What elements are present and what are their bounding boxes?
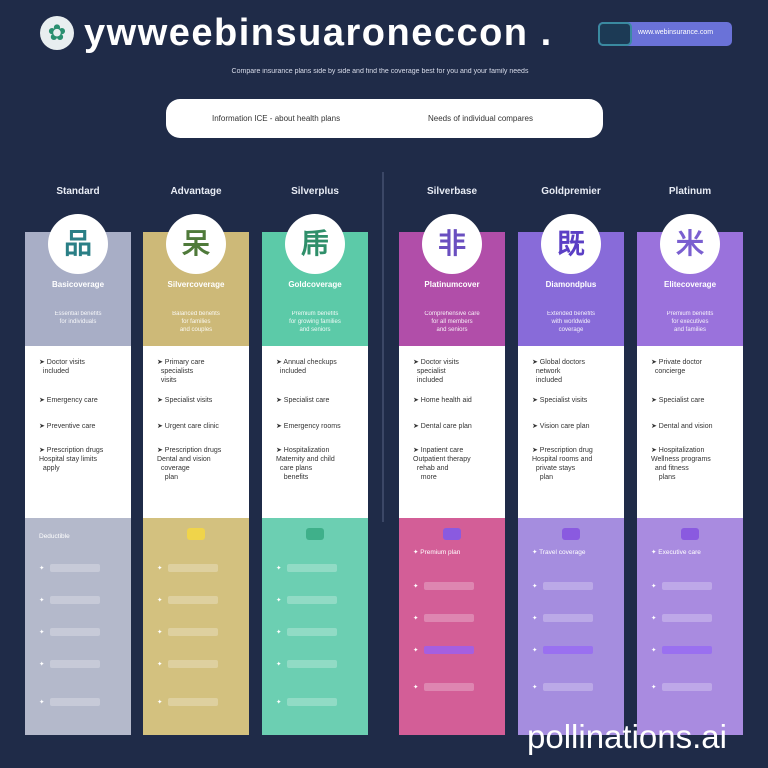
subtitle: Compare insurance plans side by side and find the coverage best for you and your family needs bbox=[232, 68, 528, 75]
panel: plan 1: ✦ bbox=[39, 565, 44, 572]
panel: plan 5: ➤ Vision care plan bbox=[532, 423, 590, 430]
panel: plan 3: 乕 bbox=[301, 228, 329, 259]
panel: plan 3: ➤ Specialist care bbox=[276, 397, 329, 404]
panel: plan 4: Outpatient therapy bbox=[413, 456, 471, 463]
panel: plan 3: and seniors bbox=[299, 327, 331, 333]
panel: plan 2: ✦ bbox=[157, 699, 162, 706]
panel: plan 5: plan bbox=[540, 474, 553, 481]
panel: plan 4: ✦ bbox=[413, 615, 418, 622]
panel: plan 4: ➤ Doctor visits bbox=[413, 359, 459, 366]
divider bbox=[382, 172, 384, 522]
panel: plan 1: ➤ Doctor visits bbox=[39, 359, 85, 366]
panel: plan 1 bbox=[25, 214, 131, 735]
panel: plan 5: 既 bbox=[557, 228, 585, 259]
panel: plan 2: ➤ Prescription drugs bbox=[157, 447, 221, 454]
text: Silverplus bbox=[291, 186, 339, 197]
panel: plan 4: ✦ bbox=[413, 583, 418, 590]
panel: plan 2: ➤ Specialist visits bbox=[157, 397, 212, 404]
panel: plan 2: ➤ Primary care bbox=[157, 359, 204, 366]
panel: plan 3: Goldcoverage bbox=[288, 280, 342, 289]
panel: plan 3: ➤ Emergency rooms bbox=[276, 423, 341, 430]
panel: plan 4: for all members bbox=[431, 319, 473, 325]
panel: plan 4: ✦ bbox=[413, 684, 418, 691]
panel: plan 3: for growing families bbox=[289, 319, 341, 325]
panel: plan 5: ➤ Prescription drug bbox=[532, 447, 593, 454]
panel: plan 3: Premium benefits bbox=[292, 311, 338, 317]
panel: plan 2: for families bbox=[181, 319, 210, 325]
panel: plan 6: ➤ Hospitalization bbox=[651, 447, 704, 454]
panel: plan 1: Hospital stay limits bbox=[39, 456, 97, 463]
panel: plan 1: included bbox=[43, 368, 69, 375]
panel: plan 2: and couples bbox=[180, 327, 212, 333]
column labels: Standard bbox=[56, 186, 100, 197]
panel: plan 5: private stays bbox=[536, 465, 575, 472]
panel: plan 3: ➤ Hospitalization bbox=[276, 447, 329, 454]
text: Silverbase bbox=[427, 186, 477, 197]
panel: plan 6: ✦ bbox=[651, 647, 656, 654]
panel: plan 4: specialist bbox=[417, 368, 446, 375]
panel: plan 2 bbox=[143, 214, 249, 735]
panel: plan 6: Elitecoverage bbox=[664, 280, 716, 289]
panel: plan 5: ➤ Specialist visits bbox=[532, 397, 587, 404]
title: ywweebinsuaroneccon . bbox=[84, 12, 553, 54]
panel: plan 1: ✦ bbox=[39, 597, 44, 604]
panel: plan 5: Hospital rooms and bbox=[532, 456, 592, 463]
panel: plan 3: ✦ bbox=[276, 565, 281, 572]
panel: plan 2: Dental and vision bbox=[157, 456, 211, 463]
panel: plan 2: ✦ bbox=[157, 661, 162, 668]
panel: plan 3 bbox=[262, 214, 368, 735]
panel: plan 6: Wellness programs bbox=[651, 456, 711, 463]
panel: plan 5: ✦ Travel coverage bbox=[532, 549, 586, 556]
panel: plan 3: ✦ bbox=[276, 661, 281, 668]
panel: plan 5: coverage bbox=[559, 327, 583, 333]
logo icon bbox=[40, 16, 74, 50]
panel: plan 4: rehab and bbox=[417, 465, 448, 472]
panel: plan 6: ➤ Specialist care bbox=[651, 397, 704, 404]
text: Goldpremier bbox=[541, 186, 601, 197]
panel: plan 4: ➤ Home health aid bbox=[413, 397, 472, 404]
panel: plan 5: network bbox=[536, 368, 560, 375]
panel: plan 5: ✦ bbox=[532, 615, 537, 622]
panel: plan 2: ✦ bbox=[157, 629, 162, 636]
panel: plan 2: Balanced benefits bbox=[172, 311, 220, 317]
panel: plan 5: ➤ Global doctors bbox=[532, 359, 585, 366]
watermark: pollinations.ai bbox=[527, 718, 727, 755]
panel: plan 4: Comprehensive care bbox=[424, 311, 480, 317]
panel: plan 1: for individuals bbox=[60, 319, 96, 325]
tab bar bbox=[166, 99, 603, 138]
panel: plan 6: ✦ bbox=[651, 615, 656, 622]
panel: plan 5: with worldwide bbox=[551, 319, 590, 325]
panel: plan 3: ➤ Annual checkups bbox=[276, 359, 337, 366]
panel: plan 1: Deductible bbox=[39, 533, 70, 540]
panel: plan 4: included bbox=[417, 377, 443, 384]
panel: plan 6: concierge bbox=[655, 368, 685, 375]
panel: plan 6: ✦ bbox=[651, 583, 656, 590]
panel: plan 2: visits bbox=[161, 377, 176, 384]
panel: plan 5: ✦ bbox=[532, 684, 537, 691]
panel: plan 3: ✦ bbox=[276, 699, 281, 706]
panel: plan 1: apply bbox=[43, 465, 60, 472]
panel: plan 4: ✦ Premium plan bbox=[413, 549, 460, 556]
panel: plan 2: Silvercoverage bbox=[168, 280, 224, 289]
panel: plan 5: ✦ bbox=[532, 583, 537, 590]
panel: plan 6 bbox=[637, 214, 743, 735]
panel: plan 5 bbox=[518, 214, 624, 735]
panel: plan 2: plan bbox=[165, 474, 178, 481]
panel: plan 6: 米 bbox=[676, 228, 704, 259]
panel: plan 6: for executives bbox=[671, 319, 709, 325]
tab bar: Needs of individual compares bbox=[428, 114, 533, 123]
panel: plan 1: Essential benefits bbox=[54, 311, 102, 317]
panel: plan 1: Basicoverage bbox=[52, 280, 104, 289]
panel: plan 3: benefits bbox=[284, 474, 308, 481]
panel: plan 4: ➤ Dental care plan bbox=[413, 423, 472, 430]
panel: plan 4: ➤ Inpatient care bbox=[413, 447, 463, 454]
panel: plan 2: 呆 bbox=[182, 228, 210, 259]
panel: plan 5: Diamondplus bbox=[546, 280, 596, 289]
panel: plan 6: Premium benefits bbox=[667, 311, 713, 317]
panel: plan 6: ✦ bbox=[651, 684, 656, 691]
panel: plan 4: more bbox=[421, 474, 437, 481]
tab bar: Information ICE - about health plans bbox=[212, 114, 340, 123]
panel: plan 1: ✦ bbox=[39, 629, 44, 636]
panel: plan 1: ➤ Emergency care bbox=[39, 397, 98, 404]
panel: plan 3: Maternity and child bbox=[276, 456, 335, 463]
panel: plan 5: ✦ bbox=[532, 647, 537, 654]
panel: plan 5: included bbox=[536, 377, 562, 384]
panel: plan 6: ➤ Dental and vision bbox=[651, 423, 713, 430]
header button bbox=[598, 22, 732, 46]
text: Advantage bbox=[170, 186, 222, 197]
panel: plan 6: ✦ Executive care bbox=[651, 549, 701, 556]
panel: plan 2: coverage bbox=[161, 465, 190, 472]
text: Platinum bbox=[669, 186, 711, 197]
panel: plan 1: 品 bbox=[64, 228, 92, 259]
panel: plan 5: Extended benefits bbox=[547, 311, 595, 317]
header button: www.webinsurance.com bbox=[638, 29, 713, 36]
panel: plan 3: ✦ bbox=[276, 597, 281, 604]
panel: plan 4: 非 bbox=[438, 228, 466, 259]
panel: plan 4: and seniors bbox=[436, 327, 468, 333]
panel: plan 6: and families bbox=[674, 327, 706, 333]
panel: plan 1: ✦ bbox=[39, 699, 44, 706]
panel: plan 2: ➤ Urgent care clinic bbox=[157, 423, 219, 430]
panel: plan 3: ✦ bbox=[276, 629, 281, 636]
panel: plan 4 bbox=[399, 214, 505, 735]
panel: plan 2: ✦ bbox=[157, 565, 162, 572]
panel: plan 3: included bbox=[280, 368, 306, 375]
panel: plan 2: specialists bbox=[161, 368, 193, 375]
panel: plan 6: and fitness bbox=[655, 465, 689, 472]
logo icon: ✿ bbox=[48, 20, 66, 45]
panel: plan 1: ➤ Prescription drugs bbox=[39, 447, 103, 454]
panel: plan 4: ✦ bbox=[413, 647, 418, 654]
panel: plan 3: care plans bbox=[280, 465, 312, 472]
panel: plan 1: ✦ bbox=[39, 661, 44, 668]
panel: plan 6: ➤ Private doctor bbox=[651, 359, 702, 366]
panel: plan 1: ➤ Preventive care bbox=[39, 423, 95, 430]
panel: plan 2: ✦ bbox=[157, 597, 162, 604]
panel: plan 4: Platinumcover bbox=[424, 280, 480, 289]
panel: plan 6: plans bbox=[659, 474, 676, 481]
